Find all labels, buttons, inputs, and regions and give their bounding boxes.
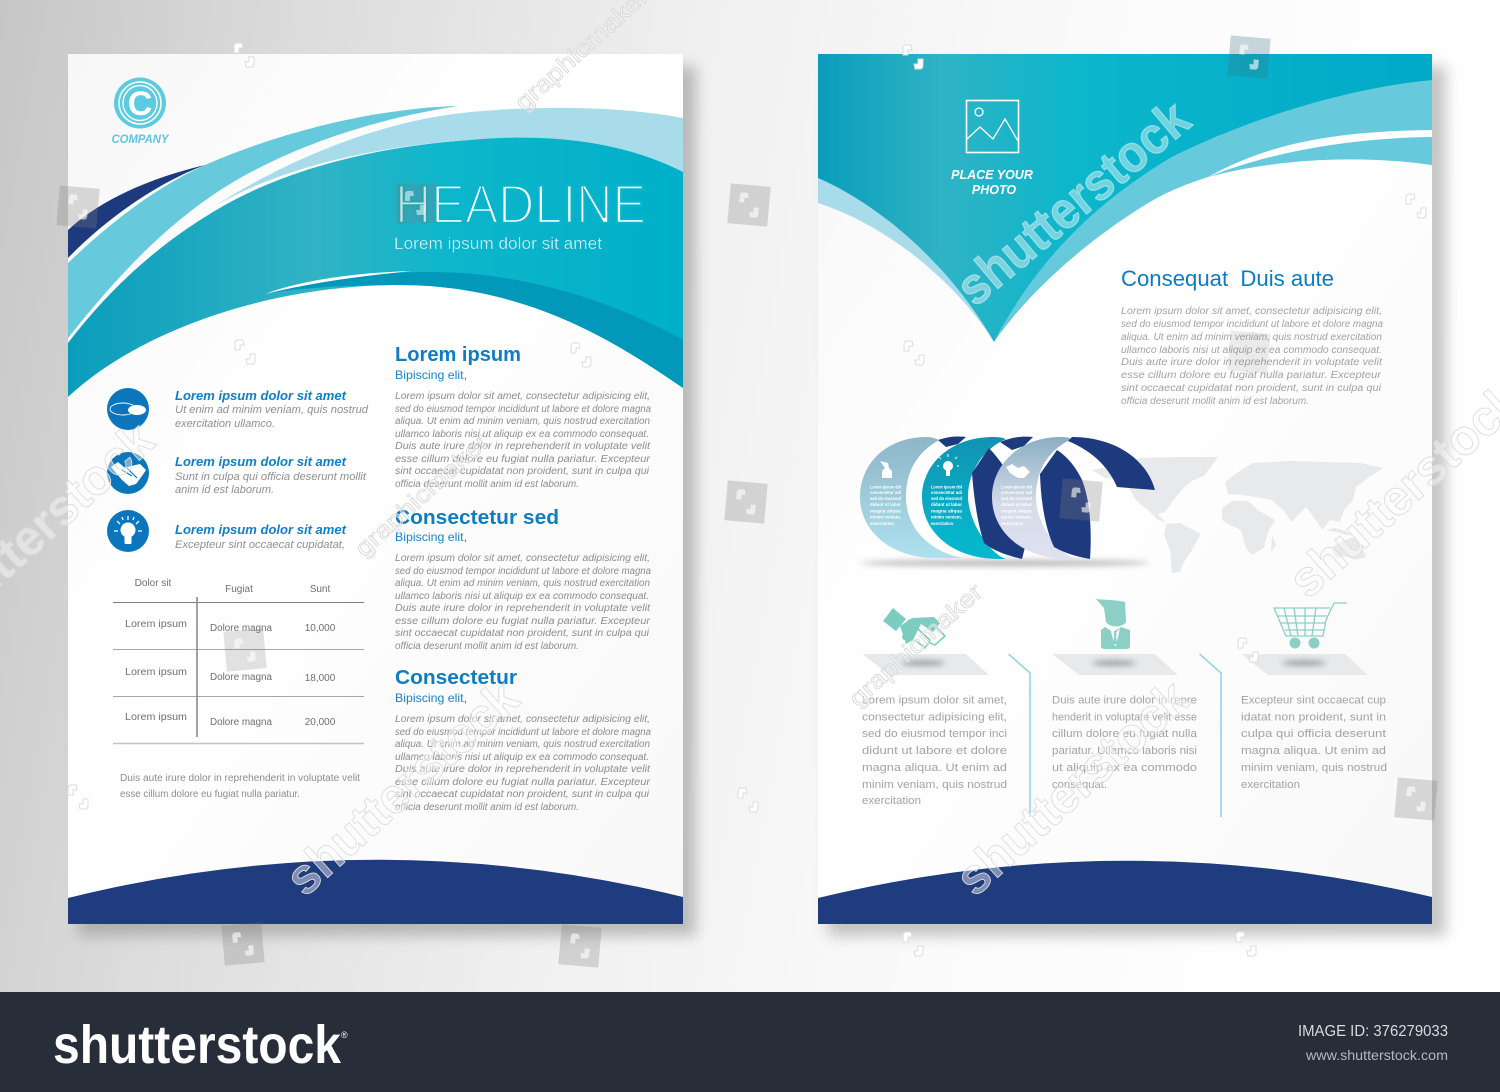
header: teal V shape [818, 54, 1432, 342]
text block: consectetur sed: Bipiscing elit, [395, 530, 467, 544]
watermark: outlined shutterstock marks: graphicmaker [350, 429, 494, 562]
table: 18,000 [305, 673, 336, 684]
footer registered mark: ® [341, 1030, 348, 1040]
text block: consectetur: Lorem ipsum dolor sit amet, consectetur adipisicing elit, [395, 714, 650, 725]
header wave: mid blue band [68, 106, 458, 338]
watermark: outlined shutterstock marks: shutterstock [945, 669, 1199, 906]
ribbon 1: consectetur adi [870, 490, 901, 495]
footnote [120, 773, 360, 800]
watermark: outlined shutterstock marks: shutterstock [275, 669, 529, 906]
text block: consectetur: officia deserunt mollit anim id est laborum. [395, 802, 579, 813]
ribbon 3 [992, 437, 1155, 559]
panel: left brochure page [68, 54, 683, 924]
table: Dolore magna [210, 672, 272, 683]
column: person: pariatur. Ullamco laboris nisi [1052, 745, 1197, 757]
logo: C [128, 85, 152, 123]
column: handshake: sed do eiusmod tempor inci [862, 728, 1007, 740]
footer logo: shutterstock [53, 1015, 342, 1075]
text block: consectetur sed: esse cillum dolore eu fugiat nulla pariatur. Excepteur [395, 616, 651, 627]
ribbon 3: Lorem ipsum dol [1001, 484, 1032, 490]
ribbon 2: sed do eiusmod [931, 496, 962, 501]
column: person: henderit in voluptate velit esse [1052, 712, 1197, 724]
divider arrow 2 [1200, 654, 1221, 817]
table: Lorem ipsum [125, 667, 187, 678]
column: cart [1241, 603, 1387, 791]
text block: lorem ipsum: sint occaecat cupidatat non proident, sunt in culpa qui [395, 466, 650, 477]
text block: consequat: aliqua. Ut enim ad minim veniam, quis nostrud exercitation [1121, 332, 1382, 343]
text block: consectetur sed: Consectetur sed [395, 507, 559, 529]
ribbon 3: exercitation [1001, 521, 1023, 526]
header wave: white swoosh [265, 271, 412, 294]
ribbon 2: minim veniam, [931, 514, 962, 520]
ribbon 1: sed do eiusmod [870, 496, 901, 501]
header: left light band [818, 178, 994, 342]
text block: consectetur: ullamco laboris nisi ut aliquip ex ea commodo consequat. [395, 752, 649, 763]
ribbon shadow [860, 560, 1150, 566]
text block: consectetur sed: sed do eiusmod tempor incididunt ut labore et dolore magna [395, 566, 651, 577]
column: cart: idatat non proident, sunt in [1241, 712, 1386, 724]
divider arrow 1 [1008, 654, 1030, 817]
column: handshake: minim veniam, quis nostrud [862, 779, 1007, 791]
ribbon 3: consectetur adi [1001, 490, 1032, 495]
column: handshake: Lorem ipsum dolor sit amet, [862, 694, 1007, 706]
feature: handshake: Sunt in culpa qui officia deserunt mollit [175, 471, 367, 483]
text block: lorem ipsum: sed do eiusmod tempor incididunt ut labore et dolore magna [395, 404, 651, 415]
feature: handshake: Lorem ipsum dolor sit amet [175, 454, 347, 469]
panel: right brochure page [818, 54, 1432, 924]
photo caption: PLACE YOUR [951, 168, 1033, 182]
ribbon 3: didunt ut labor [1001, 502, 1032, 507]
text block: lorem ipsum: Lorem ipsum dolor sit amet, consectetur adipisicing elit, [395, 391, 650, 402]
footnote: esse cillum dolore eu fugiat nulla pariatur. [120, 789, 300, 800]
panel: right page shadow [828, 66, 1446, 936]
text block: consequat: officia deserunt mollit anim id est laborum. [1121, 396, 1309, 407]
ribbon 1: didunt ut labor [870, 502, 901, 507]
headline: HEADLINE [395, 173, 646, 235]
text block: consectetur: Duis aute irure dolor in reprehenderit in voluptate velit [395, 764, 651, 775]
text block: lorem ipsum: officia deserunt mollit anim id est laborum. [395, 479, 579, 490]
table: Dolore magna [210, 623, 272, 634]
text block: lorem ipsum: esse cillum dolore eu fugiat nulla pariatur. Excepteur [395, 454, 651, 465]
footnote: Duis aute irure dolor in reprehenderit in voluptate velit [120, 773, 360, 784]
table: Dolore magna [210, 717, 272, 728]
table: Fugiat [225, 584, 253, 595]
column: person: Duis aute irure dolor in repre [1052, 694, 1197, 706]
column: cart: culpa qui officia deserunt [1241, 728, 1386, 740]
column: handshake: didunt ut labore et dolore [862, 745, 1007, 757]
photo caption: PHOTO [972, 183, 1016, 197]
text block: consectetur sed: ullamco laboris nisi ut aliquip ex ea commodo consequat. [395, 591, 649, 602]
logo [112, 78, 170, 146]
text block: consectetur sed: sint occaecat cupidatat non proident, sunt in culpa qui [395, 628, 650, 639]
panel: left page shadow [78, 66, 696, 936]
text block: consectetur: Consectetur [395, 667, 517, 689]
table: Lorem ipsum [125, 619, 187, 630]
ribbon 2: didunt ut labor [931, 502, 962, 507]
footer bar [0, 992, 1500, 1092]
feature: light bulb: Excepteur sint occaecat cupidatat, [175, 539, 345, 551]
text block: lorem ipsum [395, 344, 651, 490]
table: Dolor sit [135, 578, 172, 589]
feature: light bulb [107, 510, 347, 552]
ribbon 2: Lorem ipsum dol [931, 484, 962, 490]
icon: person [1096, 599, 1130, 649]
text block: consectetur sed: Lorem ipsum dolor sit amet, consectetur adipisicing elit, [395, 553, 650, 564]
ribbon 1: Lorem ipsum dol [870, 484, 901, 490]
table: Sunt [310, 584, 331, 595]
text block: consequat: esse cillum dolore eu fugiat nulla pariatur. Excepteur [1121, 370, 1382, 381]
icon: handshake [883, 608, 945, 648]
text block: consequat: sed do eiusmod tempor incididunt ut labore et dolore magna [1121, 319, 1383, 330]
photo caption [951, 168, 1033, 197]
column: person: consequat. [1052, 779, 1107, 791]
text block: consectetur: Bipiscing elit, [395, 691, 467, 705]
text block: consectetur: esse cillum dolore eu fugiat nulla pariatur. Excepteur [395, 777, 651, 788]
table: 20,000 [305, 717, 336, 728]
text block: consectetur sed: aliqua. Ut enim ad minim veniam, quis nostrud exercitation [395, 578, 650, 589]
watermark: teal shutterstock: shutterstock [945, 90, 1201, 317]
ribbon 1 [860, 436, 966, 558]
text block: consectetur sed [395, 507, 651, 652]
text block: consequat: ullamco laboris nisi ut aliquip ex ea commodo consequat. [1121, 345, 1382, 356]
table: 10,000 [305, 623, 336, 634]
icon: photo placeholder [966, 100, 1018, 152]
headline: Lorem ipsum dolor sit amet [394, 234, 602, 253]
ribbon 2: exercitation [931, 521, 953, 526]
text block: lorem ipsum: aliqua. Ut enim ad minim veniam, quis nostrud exercitation [395, 416, 650, 427]
text block: consequat: Lorem ipsum dolor sit amet, consectetur adipisicing elit, [1121, 306, 1382, 317]
ribbon infographic [860, 436, 1155, 566]
text block: consequat: sint occaecat cupidatat non proident, sunt in culpa qui [1121, 383, 1382, 394]
bottom navy band [68, 860, 683, 924]
ribbon 3: minim veniam, [1001, 514, 1032, 520]
icon: shopping cart [1274, 603, 1347, 648]
feature: speech bubbles: exercitation ullamco. [175, 418, 275, 430]
footer image id: IMAGE ID: 376279033 [1298, 1023, 1448, 1040]
text block: consectetur sed: Duis aute irure dolor in reprehenderit in voluptate velit [395, 603, 651, 614]
watermark: logo squares [56, 35, 1438, 968]
ribbon 1: minim veniam, [870, 514, 901, 520]
feature: speech bubbles [107, 388, 369, 430]
column: cart: magna aliqua. Ut enim ad [1241, 745, 1386, 757]
table: Lorem ipsum [125, 712, 187, 723]
column: handshake [862, 608, 1007, 807]
column: person: ut aliquip ex ea commodo [1052, 762, 1197, 774]
bottom navy band [818, 861, 1432, 924]
ribbon 2: consectetur adi [931, 490, 962, 495]
header wave: light blue band [213, 108, 683, 207]
feature: light bulb: Lorem ipsum dolor sit amet [175, 522, 347, 537]
text block: consequat: Duis aute irure dolor in reprehenderit in voluptate velit [1121, 357, 1383, 368]
header wave: navy sliver [68, 165, 205, 258]
column: cart: Excepteur sint occaecat cup [1241, 694, 1386, 706]
table [113, 578, 364, 744]
header: lower swoosh [1208, 137, 1432, 177]
ribbon 2 [922, 437, 1033, 559]
text block: lorem ipsum: Duis aute irure dolor in reprehenderit in voluptate velit [395, 441, 651, 452]
text block: lorem ipsum: ullamco laboris nisi ut aliquip ex ea commodo consequat. [395, 429, 649, 440]
text block: consectetur [395, 667, 651, 813]
ribbon 3: sed do eiusmod [1001, 496, 1032, 501]
text block: consequat: Consequat Duis aute [1121, 266, 1334, 291]
ribbon 2: magna aliqua [931, 508, 963, 514]
column: person: cillum dolore eu fugiat nulla [1052, 728, 1198, 740]
ribbon 3: magna aliqua [1001, 508, 1033, 514]
text block: consectetur: aliqua. Ut enim ad minim veniam, quis nostrud exercitation [395, 739, 650, 750]
feature: speech bubbles: Ut enim ad minim veniam, quis nostrud [175, 404, 369, 416]
feature: handshake [107, 452, 367, 496]
feature: speech bubbles: Lorem ipsum dolor sit amet [175, 388, 347, 403]
column: cart: exercitation [1241, 779, 1300, 791]
header wave: dark teal band [268, 272, 683, 388]
text block: lorem ipsum: Lorem ipsum [395, 344, 521, 366]
watermark: outlined shutterstock marks: graphicmaker [510, 0, 654, 116]
column: handshake: magna aliqua. Ut enim ad [862, 762, 1007, 774]
column: handshake: consectetur adipisicing elit, [862, 712, 1007, 724]
feature: handshake: anim id est laborum. [175, 484, 274, 496]
header wave: main teal body [68, 138, 683, 397]
column: cart: minim veniam, quis nostrud [1241, 762, 1387, 774]
text block: consectetur sed: officia deserunt mollit anim id est laborum. [395, 641, 579, 652]
header: mid blue swoosh [994, 78, 1432, 342]
footer url: www.shutterstock.com [1305, 1047, 1448, 1063]
watermark: outlined shutterstock marks: graphicmaker [844, 579, 988, 712]
watermark: outlined logo marks [68, 43, 1426, 956]
column: handshake: exercitation [862, 795, 921, 807]
world map [1092, 457, 1383, 573]
ribbon 1: exercitation [870, 521, 894, 526]
text block: consectetur: sint occaecat cupidatat non proident, sunt in culpa qui [395, 789, 650, 800]
column: person [1052, 599, 1198, 791]
text block: consequat [1121, 266, 1383, 407]
text block: consectetur: sed do eiusmod tempor incididunt ut labore et dolore magna [395, 727, 651, 738]
ribbon 1: magna aliqua [870, 508, 902, 514]
logo: COMPANY [112, 134, 170, 146]
text block: lorem ipsum: Bipiscing elit, [395, 368, 467, 382]
